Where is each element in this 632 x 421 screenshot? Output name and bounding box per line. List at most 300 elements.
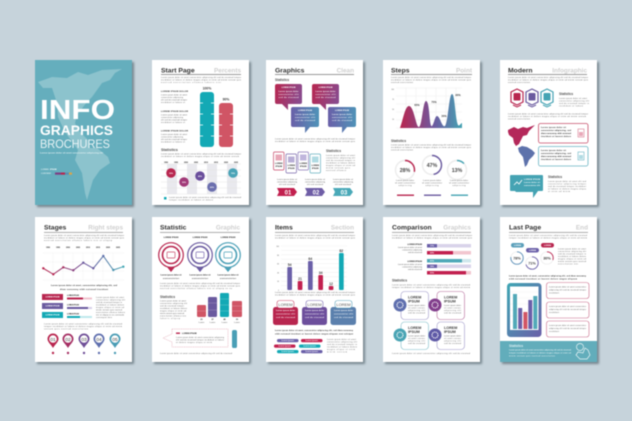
- pin 05: 05: [112, 337, 118, 343]
- bar chart: 64: [308, 257, 312, 261]
- subtitle: Lorem ipsum dolor sit amet consectetur adipiscing elit: [40, 152, 103, 154]
- intro text: [44, 234, 124, 242]
- icon cards: LOREM: [275, 163, 283, 165]
- statistics text: tempor incididunt ut labore et dolore magna aliqua ut enim ad minim: [392, 286, 470, 289]
- side statistics text: magna aliqua ut enim ad: [326, 164, 355, 167]
- subheading: Statistics: Statistics: [160, 295, 175, 299]
- bubble chart: 15%: [169, 173, 173, 175]
- callout 2: [312, 84, 339, 110]
- card: crimson: Lorem ipsum dolor sit: [541, 126, 566, 129]
- ring pin: crimson: LOREM IPSUM: [164, 237, 179, 239]
- card: gear blue: IPSUM: [408, 300, 420, 304]
- area chart: 70%: [431, 100, 437, 104]
- statistics text: incididunt ut labore et dolore magna aliqua ut enim ad minim veniam quis: [391, 146, 471, 149]
- footer band: Statistics: [509, 344, 523, 348]
- phone with bar chart: [507, 283, 542, 337]
- card 1: Lorem ipsum dolor sit amet consectetur: [549, 286, 586, 288]
- intro text: Lorem ipsum dolor sit amet consectetur adipiscing elit sed do eiusmod: [509, 234, 587, 237]
- intro text: incididunt ut labore et dolore magna aliqua ut enim ad minim veniam quis: [508, 78, 588, 82]
- legend: details: LOREM:: [41, 169, 49, 171]
- card: purple: consectetur elit: [305, 312, 324, 316]
- intro text: tempor incididunt ut labore et dolore magna aliqua ut enim ad minim: [509, 236, 587, 240]
- bubble chart: 60%: [210, 187, 214, 189]
- text block 2: elit sed do eiusmod tempor: [161, 118, 187, 122]
- bold paragraph: Lorem ipsum dolor sit amet, consectetur adipiscing elit, sed diam nonummy: [275, 329, 354, 332]
- card: teal: [538, 146, 588, 166]
- side text: exercitation ullamco nisi: [160, 314, 187, 318]
- card: teal: tincidunt ut laoreet dolore: [541, 158, 572, 161]
- area chart: 30%: [441, 114, 447, 118]
- bubble chart: 2015: [214, 162, 218, 164]
- donut 47%: sit amet consectetur: [422, 182, 442, 184]
- stacked bar chart: 45: [223, 318, 226, 321]
- bubble chart: 2005: [194, 162, 198, 164]
- intro text: Lorem ipsum dolor sit amet consectetur adipiscing elit sed do eiusmod tempor: [44, 234, 124, 237]
- label block 1: Lorem ipsum dolor sit amet: [398, 246, 422, 249]
- side text: consectetur adipiscing elit: [558, 250, 586, 253]
- paragraph: [508, 112, 588, 120]
- icon: hexagon teal: [541, 89, 553, 107]
- side text: Lorem ipsum dolor sit amet: [558, 248, 586, 250]
- panel: Start Page: [152, 60, 251, 207]
- bubble chart: [161, 162, 241, 194]
- callout 4: [328, 107, 356, 133]
- card 3: [546, 321, 589, 337]
- progress row 2: LOREM IPSUM: [67, 304, 80, 306]
- bottom statistics text: sed do eiusmod tempor incididunt: [548, 185, 586, 188]
- ribbon 01: consectetur adipiscing: [277, 180, 297, 184]
- card: gear purple: IPSUM: [444, 330, 456, 334]
- callout 3: LOREM IPSUM: [298, 110, 312, 112]
- donut 28%: adipiscing: [398, 185, 412, 187]
- card: crimson: diam nonummy nibh euismod: [541, 133, 572, 135]
- panel: Stages: [35, 217, 134, 364]
- dashed callout with arrow: LOREM IPSUM: [182, 333, 197, 335]
- horizontal progress bars: 62%: [430, 252, 434, 254]
- stacked bar chart: Lorem: [234, 322, 240, 324]
- donut 30%: [541, 243, 554, 264]
- map: south america: [518, 146, 535, 167]
- line chart: [42, 247, 125, 280]
- card: gear blue: sed do eiusmod: [408, 312, 425, 314]
- ribbon 01: [277, 178, 297, 196]
- bar chart: 40: [277, 272, 279, 274]
- heading right: Clean: [337, 68, 354, 74]
- stacked bar chart: Lorem: [222, 322, 228, 324]
- card: teal: consectetur adipiscing, sed: [541, 152, 572, 155]
- area chart: 25: [392, 119, 394, 121]
- label block 2: sed do eiusmod: [408, 269, 422, 271]
- donut 28%: sit amet consectetur: [395, 182, 415, 184]
- heading right: Graphic: [216, 224, 240, 232]
- text block 1: consectetur adipiscing: [161, 96, 183, 99]
- ring pin: purple: [188, 237, 212, 280]
- callout: teal speech bubble: [510, 175, 543, 198]
- card: gear purple: sed do eiusmod: [444, 343, 461, 345]
- horizontal progress bars: [427, 244, 471, 274]
- card: gear blue: Lorem ipsum dolor: [408, 305, 425, 307]
- card: gear crimson: sit amet consec: [444, 306, 461, 310]
- side text: minim veniam quis nostrud: [96, 308, 122, 312]
- pill labels: Lorem ipsum: [305, 340, 318, 342]
- icon cards: LOREM: [299, 163, 307, 165]
- intro text: Lorem ipsum dolor sit amet consectetur adipiscing elit sed do eiusmod tempor: [392, 234, 472, 237]
- side statistics text: Lorem ipsum dolor sit amet: [559, 97, 587, 100]
- footer text: Lorem ipsum dolor sit amet consectetur adipiscing elit sed do eiusmod: [392, 352, 470, 355]
- side text: magna aliqua ut enim ad: [160, 310, 186, 312]
- ribbon 03: [333, 178, 353, 196]
- callout 2: sed do eiusmod: [316, 97, 336, 99]
- footer band: tempor incididunt ut labore et dolore magna aliqua ut enim ad: [509, 352, 571, 354]
- side statistics text: sed do eiusmod tempor in: [559, 102, 589, 105]
- line chart: 1995: [56, 247, 60, 249]
- panel: Last Page: [500, 217, 599, 364]
- card 3: adipiscing elit sed do eiusmod tempor: [549, 327, 586, 330]
- progress row 3: LOREM IPSUM: [67, 314, 80, 316]
- intro text: Lorem ipsum dolor sit amet consectetur adipiscing elit sed do eiusmod tempor: [275, 234, 355, 237]
- side statistics text: Statistics: [559, 92, 573, 96]
- horizontal progress bars: 19%: [430, 266, 434, 268]
- statistics text: [391, 144, 471, 152]
- pin 02: 02: [65, 337, 71, 343]
- ring pin: purple: consectetur: [192, 277, 208, 280]
- intro text: incididunt ut labore et dolore magna aliqua ut enim ad minim veniam quis: [161, 78, 241, 82]
- card: blue: consectetur elit: [334, 312, 353, 316]
- callout: teal speech bubble: LOREM IPSUM: [524, 179, 540, 181]
- heading right: Graphics: [443, 224, 471, 232]
- line chart: 2000: [66, 247, 70, 249]
- dashed callout with arrow: elit sed do eiusmod tempor incididunt ut labore: [176, 338, 225, 342]
- stacked bar chart: 31: [236, 319, 239, 321]
- card: crimson: Lorem ipsum dolor: [276, 310, 295, 312]
- bar chart: 54: [288, 263, 292, 267]
- pin 02: [62, 334, 74, 354]
- side statistics text: consectetur adipiscing elit: [559, 100, 589, 102]
- icon: world map: [38, 69, 122, 200]
- heading: Modern: [508, 68, 533, 74]
- column chart: percents: 90%: [223, 98, 229, 102]
- bubble chart: 45%: [198, 175, 202, 178]
- progress row 2: [42, 303, 92, 309]
- side text: laboris aliquip: [160, 318, 181, 320]
- card: gear teal: LOREM: [408, 326, 421, 330]
- bubble chart: 2025: [234, 162, 238, 164]
- side text: exercitation ullamco laboris: [96, 311, 125, 314]
- line chart: 2015: [96, 247, 100, 249]
- heading: Items: [275, 224, 293, 232]
- pin 05: [110, 334, 120, 354]
- card: gear blue: [394, 292, 428, 320]
- legend: details: [41, 169, 72, 175]
- title: INFO: INFO: [40, 94, 115, 125]
- card 3: Lorem ipsum dolor sit amet consectetur: [549, 324, 586, 327]
- side statistics text: Lorem ipsum dolor sit amet: [326, 154, 355, 157]
- bar chart: 60: [277, 264, 279, 266]
- area chart: 75: [392, 99, 394, 101]
- statistics text: [392, 284, 470, 289]
- card: gear crimson: IPSUM: [444, 300, 456, 304]
- subheading: Statistics: Statistics: [275, 78, 289, 82]
- intro text: Lorem ipsum dolor sit amet consectetur adipiscing elit sed do eiusmod tempor: [161, 76, 241, 79]
- intro text: nostrud exercitation ullamco laboris nisi ut aliquip: [44, 239, 113, 242]
- side text: consequat duis: [96, 316, 112, 319]
- bar chart: 34: [319, 271, 323, 275]
- heading right: Right steps: [88, 224, 123, 232]
- text block 2: consectetur adipiscing: [161, 116, 183, 119]
- pill labels: [274, 339, 322, 353]
- heading right: Percents: [214, 68, 241, 74]
- area chart: 65%: [414, 103, 420, 107]
- side statistics text: Statistics: [326, 149, 341, 153]
- callout 1: LOREM IPSUM: [281, 87, 296, 89]
- panel: Statistic: [152, 217, 251, 364]
- pin 03: [78, 334, 90, 354]
- bubble chart: 30%: [182, 182, 186, 184]
- donut 71%: LOREM: [529, 250, 536, 252]
- heading: Statistic: [160, 224, 187, 232]
- donut 28%: 28%: [400, 168, 411, 174]
- pill labels: Lorem ipsum: [281, 340, 294, 342]
- card: blue: sed do eiusmod: [334, 317, 354, 319]
- chart legend: [164, 196, 241, 202]
- footer band: minim veniam quis nostrud exercitation: [509, 354, 555, 358]
- stacked bar chart: 37: [211, 319, 214, 321]
- bold paragraph: [509, 274, 587, 280]
- heading: Steps: [391, 68, 410, 74]
- progress row 3: [42, 312, 92, 318]
- side text: [160, 300, 188, 320]
- intro text: nostrud exercitation: [508, 81, 530, 84]
- paragraph: nostrud exercitation: [508, 118, 530, 120]
- statistics text: incididunt ut labore et dolore magna aliqua ut enim ad minim veniam: [161, 155, 239, 158]
- dashed callout with arrow: et dolore magna aliqua ut enim: [176, 341, 212, 344]
- bubble chart: 2000: [184, 162, 188, 164]
- ribbon 03: 03: [341, 190, 348, 196]
- ribbon 02: 02: [313, 190, 320, 196]
- bubble chart: 1995: [174, 162, 178, 164]
- callout 2: Lorem ipsum dolor: [316, 91, 336, 93]
- bottom statistics text: ut labore et dolore magna aliqua: [548, 188, 587, 190]
- heading: Graphics: [275, 68, 305, 74]
- teal capsule: [232, 330, 237, 348]
- card: crimson: [273, 300, 298, 325]
- subheading: Statistics: Statistics: [392, 278, 407, 282]
- donut 47%: Lorem ipsum dolor: [423, 180, 441, 182]
- card: gear teal: adipiscing elit: [408, 340, 425, 342]
- area chart: 100: [391, 89, 394, 91]
- chart legend: tempor incididunt ut labore et dolore: [169, 198, 214, 202]
- side text: [558, 248, 587, 266]
- card: gear crimson: [428, 292, 464, 320]
- chart caption: [51, 284, 118, 291]
- intro text: [161, 76, 241, 84]
- side text: sed do eiusmod tempor in: [327, 343, 357, 346]
- text block 1: [161, 91, 188, 104]
- card: purple: Lorem ipsum dolor: [305, 310, 324, 312]
- side text: minim veniam quis nostrud: [160, 312, 184, 315]
- side statistics text: sed do eiusmod tempor in: [326, 159, 355, 162]
- card: teal: diam nonummy nibh euismod: [541, 156, 572, 158]
- side text: consectetur adipiscing elit: [160, 302, 187, 305]
- card 1: [546, 282, 589, 298]
- paragraph: incididunt ut labore et dolore magna aliqua ut enim ad minim veniam quis: [275, 140, 355, 143]
- card: gear purple: LOREM: [444, 326, 457, 330]
- text block 3: elit sed do eiusmod tempor: [161, 138, 187, 141]
- donut 78%: [511, 243, 524, 264]
- donut 13%: [448, 160, 469, 196]
- side text: consectetur adipiscing elit: [96, 298, 125, 302]
- text block 1: incididunt ut labore et: [161, 101, 185, 104]
- card 2: Lorem ipsum dolor sit amet consectetur: [549, 305, 586, 308]
- label block 2: Lorem ipsum dolor sit amet: [398, 263, 422, 266]
- card 1: incididunt: [549, 292, 559, 294]
- callout: teal speech bubble: Lorem dolor sit: [524, 181, 540, 184]
- heading: Stages: [44, 224, 67, 232]
- card: gear teal: sed do eiusmod: [408, 343, 425, 345]
- ring pin: teal: [216, 237, 240, 280]
- footer band: [500, 341, 597, 362]
- text block 3: LOREM IPSUM DOLOR: [161, 130, 188, 132]
- paragraph: tempor incididunt ut labore et dolore magna aliqua ut enim ad minim: [44, 325, 122, 328]
- side statistics text: incididunt ut labore: [559, 104, 584, 108]
- paragraph: incididunt ut labore et dolore magna aliqua ut enim ad minim veniam quis: [275, 294, 355, 296]
- donut 28%: Lorem ipsum dolor: [396, 180, 414, 182]
- paragraph: [44, 322, 122, 330]
- icon cards: IPSUM: [312, 168, 319, 170]
- ring pin: purple: LOREM IPSUM: [193, 237, 208, 239]
- ribbon 01: Lorem ipsum dolor sit: [277, 178, 297, 181]
- heading: Statistics: Statistics: [161, 148, 178, 152]
- side statistics text: consectetur adipiscing elit: [326, 156, 355, 160]
- side text: [327, 338, 358, 354]
- side text: minim veniam: [327, 352, 347, 354]
- subheading: Statistics: Statistics: [391, 139, 406, 143]
- side text: sed do eiusmod tempor: [160, 304, 184, 308]
- callout 2: consectetur elit: [316, 93, 336, 96]
- bar chart: 21: [298, 277, 302, 281]
- label block 1: LOREM IPSUM: [407, 244, 422, 246]
- intro text: nostrud exercitation: [391, 81, 413, 84]
- card 2: incididunt: [549, 311, 559, 314]
- intro text: [508, 76, 588, 84]
- map: north america: [508, 125, 535, 146]
- callout 2: LOREM IPSUM: [318, 87, 333, 89]
- callout 3: Lorem ipsum dolor: [295, 114, 315, 116]
- paragraph: incididunt ut labore et dolore magna aliqua ut enim ad minim veniam quis: [160, 284, 240, 288]
- dashed callout with arrow: [163, 329, 228, 347]
- card: crimson: tincidunt ut laoreet dolore: [541, 135, 572, 138]
- bottom statistics text: Lorem ipsum dolor sit amet elit sed: [548, 180, 586, 183]
- pin 04: [94, 334, 104, 354]
- side text: sed do eiusmod tempor in: [96, 301, 122, 304]
- statistics text: [161, 152, 241, 158]
- progress row 1: [42, 294, 92, 300]
- card: crimson: [538, 124, 588, 143]
- icon: hexagon purple: [526, 89, 538, 107]
- paragraph: veniam quis nostrud exercitation: [44, 328, 88, 330]
- ring pin: crimson: [159, 237, 183, 280]
- bold paragraph: nibh euismod tincidunt ut laoreet dolore magna aliquam: [509, 278, 577, 280]
- progress row 1: LOREM IPSUM: [45, 297, 60, 299]
- donut 78%: 78%: [513, 256, 521, 260]
- icon cards: LOREM: [287, 165, 295, 167]
- callout 1: Lorem ipsum dolor: [278, 91, 299, 93]
- ribbon 03: elit sed eiusmod: [335, 183, 351, 186]
- footer band: Lorem ipsum dolor sit amet consectetur adipiscing elit sed do eiusmod: [509, 348, 571, 352]
- pin 01: [48, 334, 58, 354]
- side statistics text: minim veniam quis: [326, 168, 350, 170]
- card: blue: Lorem ipsum dolor: [334, 310, 353, 312]
- icon: hand and coin: [576, 344, 590, 359]
- chart legend: Lorem ipsum dolor sit amet consectetur adipiscing elit sed do eiusmod: [169, 196, 241, 199]
- panel: Graphics: [266, 60, 365, 207]
- text block 3: Lorem ipsum dolor sit amet: [161, 133, 187, 136]
- ring pin: crimson: consectetur: [163, 277, 179, 280]
- callout 4: consectetur elit: [332, 116, 352, 119]
- area chart: 90%: [455, 93, 461, 97]
- stacked bar chart: Lorem: [210, 322, 216, 324]
- bar chart: 100: [276, 246, 279, 248]
- heading: Comparison: [392, 224, 432, 232]
- callout 4: sed do eiusmod: [332, 120, 353, 122]
- donut 71%: 71%: [528, 262, 536, 266]
- paragraph: Lorem ipsum dolor sit amet consectetur adipiscing elit sed do eiusmod tempor: [275, 138, 355, 140]
- card: purple: LOREM: [307, 302, 322, 307]
- card 2: [546, 302, 589, 318]
- ribbon 02: consectetur adipiscing: [305, 180, 325, 184]
- paragraph: nostrud exercitation ullamco laboris nisi ut aliquip ex ea: [160, 287, 233, 290]
- pin 04: 04: [96, 337, 102, 343]
- line chart: 2005: [76, 247, 80, 249]
- text block 1: Lorem ipsum dolor sit amet: [161, 94, 187, 96]
- card: gear purple: sit amet consec: [444, 337, 461, 340]
- footer text: Lorem ipsum dolor sit amet consectetur adipiscing elit sed do eiusmod: [160, 352, 232, 355]
- card 3: incididunt: [549, 330, 559, 333]
- chart caption: Lorem ipsum dolor sit amet, consectetur adipiscing elit, sed: [51, 284, 118, 287]
- intro text: [509, 234, 587, 240]
- side statistics text: [326, 149, 356, 172]
- side text: consectetur adipiscing elit: [327, 340, 357, 344]
- ribbon 02: Lorem ipsum dolor sit: [305, 178, 325, 181]
- intro text: [392, 234, 472, 240]
- side text: incididunt ut labore dolore: [327, 346, 358, 348]
- pin 01: 01: [50, 337, 56, 343]
- donut 13%: Lorem ipsum dolor: [450, 180, 468, 182]
- icon cards: IPSUM: [276, 166, 282, 168]
- area chart: 50: [392, 109, 394, 111]
- side text: Lorem ipsum dolor sit amet: [96, 296, 124, 299]
- card: crimson: LOREM: [278, 302, 293, 307]
- progress row 1: LOREM IPSUM: [67, 295, 80, 297]
- card: gear purple: [428, 322, 464, 350]
- side text: exercitation nisi: [558, 262, 579, 266]
- donut 78%: LOREM: [514, 245, 521, 247]
- panel: Items: [266, 217, 365, 364]
- side text: minim veniam quis nostrud: [558, 260, 586, 263]
- side text: incididunt ut labore dolore: [160, 307, 188, 310]
- text block 3: consectetur adipiscing: [161, 136, 183, 138]
- card: gear crimson: LOREM: [444, 296, 457, 300]
- bar chart: 0: [278, 290, 279, 292]
- donut 47%: 47%: [427, 163, 438, 169]
- heading right: Infographic: [552, 68, 587, 74]
- card: gear blue: sit amet consec: [408, 306, 425, 310]
- side text: magna aliqua ut enim: [327, 348, 355, 351]
- line chart: 2020: [106, 247, 110, 249]
- text block 1: elit sed do eiusmod tempor: [161, 98, 187, 102]
- card: gear crimson: adipiscing elit: [444, 309, 461, 312]
- label block 2: LOREM IPSUM: [407, 261, 422, 263]
